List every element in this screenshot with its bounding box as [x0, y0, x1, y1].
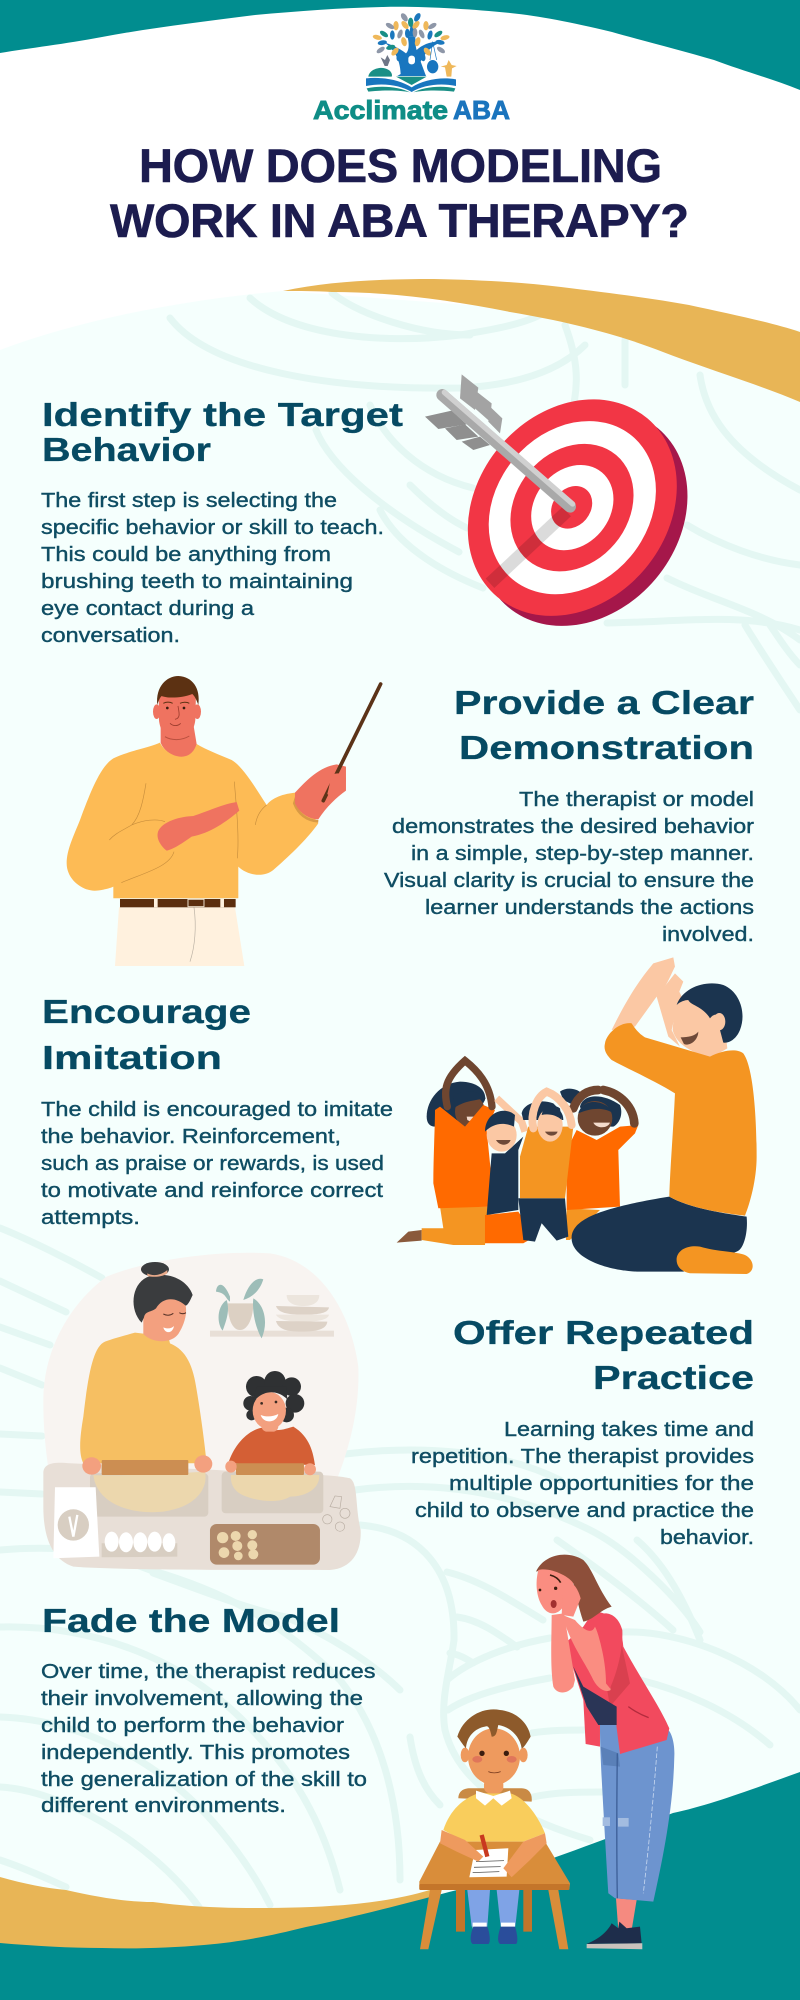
body text [411, 1418, 754, 1549]
illustration: teacher with pointer [67, 676, 381, 966]
bottom gold swoosh [0, 1877, 440, 1960]
title [110, 139, 689, 247]
illustration: adult watching child write [419, 1555, 674, 1949]
heading [454, 684, 754, 766]
body text: in a simple, step-by-step manner. [411, 842, 754, 865]
boy at desk [419, 1709, 570, 1949]
section 3: encourage imitation [41, 957, 757, 1274]
body text: Visual clarity is crucial to ensure the [384, 869, 754, 892]
heading: Offer Repeated [453, 1314, 754, 1351]
body text: The therapist or model [519, 788, 754, 811]
body text: Over time, the therapist reduces [41, 1660, 376, 1683]
section 2: provide a clear demonstration [67, 676, 754, 966]
child 1 [397, 1061, 495, 1245]
body text: multiple opportunities for the [449, 1472, 754, 1495]
body text: behavior. [660, 1526, 754, 1549]
title: WORK IN ABA THERAPY? [110, 194, 689, 247]
body text: to motivate and reinforce correct [41, 1179, 383, 1202]
body text: different environments. [41, 1794, 286, 1817]
title: HOW DOES MODELING [139, 139, 662, 192]
heading [42, 396, 403, 468]
body text: child to observe and practice the [415, 1499, 754, 1522]
heading: Practice [593, 1359, 754, 1396]
bottom teal wave [0, 1772, 800, 2000]
body text [41, 489, 384, 647]
icon: target with arrow [425, 357, 731, 668]
body text: independently. This promotes [41, 1741, 350, 1764]
top teal wave [0, 0, 800, 90]
body text: learner understands the actions [425, 896, 754, 919]
mother [80, 1262, 207, 1463]
rolling pins and hands [82, 1455, 316, 1475]
logo: Acclimate ABA [313, 12, 510, 125]
heading: Behavior [42, 431, 211, 468]
illustration: therapist and children with hands overhead [397, 957, 757, 1274]
body text [41, 1098, 393, 1229]
heading: Imitation [42, 1039, 222, 1076]
body text: conversation. [41, 624, 180, 647]
child 3 [518, 1092, 573, 1242]
body text: the generalization of the skill to [41, 1768, 367, 1791]
child 2 [485, 1098, 535, 1243]
child [228, 1371, 315, 1465]
flour bag and eggs [53, 1487, 177, 1558]
heading: Demonstration [459, 729, 754, 766]
heading [42, 993, 251, 1076]
body text: The first step is selecting the [41, 489, 337, 512]
body text: eye contact during a [41, 597, 255, 620]
logo wordmark: Acclimate [313, 95, 448, 125]
cookie tray and cutters [210, 1496, 350, 1565]
gold swoosh top [283, 279, 800, 402]
body text: The child is encouraged to imitate [41, 1098, 393, 1121]
section 5: fade the model [41, 1555, 674, 1949]
logo tree icon [366, 12, 457, 92]
heading: Fade the Model [42, 1602, 340, 1639]
child 4 [560, 1089, 638, 1240]
body text: their involvement, allowing the [41, 1687, 363, 1710]
body text: specific behavior or skill to teach. [41, 516, 384, 539]
body text: brushing teeth to maintaining [41, 570, 353, 593]
heading [453, 1314, 754, 1396]
body text [384, 788, 754, 946]
heading: Encourage [42, 993, 251, 1030]
heading: Identify the Target [42, 396, 403, 433]
body text: child to perform the behavior [41, 1714, 344, 1737]
body text: attempts. [41, 1206, 140, 1229]
body text: repetition. The therapist provides [411, 1445, 754, 1468]
body text: involved. [662, 923, 754, 946]
body text: such as praise or rewards, is used [41, 1152, 384, 1175]
heading: Provide a Clear [454, 684, 754, 721]
section 1: identify the target behavior [41, 357, 731, 668]
body text: the behavior. Reinforcement, [41, 1125, 341, 1148]
body text [41, 1660, 376, 1817]
section 4: offer repeated practice [43, 1253, 754, 1570]
body text: This could be anything from [41, 543, 331, 566]
body text: Learning takes time and [504, 1418, 754, 1441]
desk [419, 1842, 570, 1949]
therapist [572, 957, 757, 1274]
shelf with plant and dishes [210, 1279, 334, 1338]
body text: demonstrates the desired behavior [392, 815, 754, 838]
boards and dough [90, 1472, 323, 1517]
illustration: mother and child rolling dough [43, 1253, 361, 1570]
woman [536, 1555, 674, 1949]
logo: Acclimate ABA: ABA [453, 95, 510, 125]
